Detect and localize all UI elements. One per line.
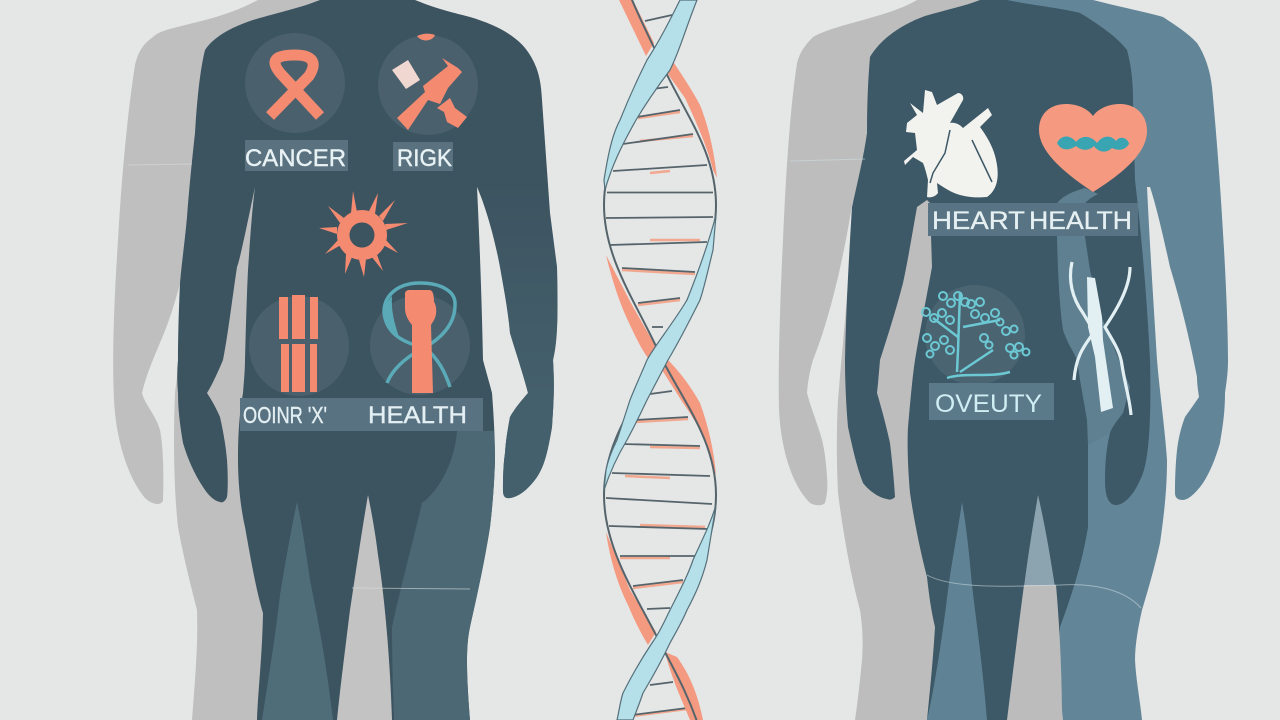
seam lines, left bbox=[128, 164, 470, 589]
icon: tree in circle bbox=[922, 285, 1030, 385]
icon: cancer cell bbox=[319, 191, 408, 277]
right figure group bbox=[779, 0, 1228, 720]
icon: joint in circle bbox=[370, 283, 470, 395]
left figure group bbox=[113, 0, 558, 720]
label: cancer: CANCER bbox=[245, 145, 346, 172]
base pair rungs, coral bbox=[620, 112, 705, 716]
dark body silhouette, left bbox=[177, 0, 558, 720]
label: obesity: OVEUTY bbox=[935, 390, 1042, 418]
helix outlines bbox=[604, 0, 716, 720]
blue strand bbox=[604, 0, 716, 720]
base pair rungs, dark bbox=[606, 15, 713, 715]
seam lines, right bbox=[790, 159, 1141, 608]
label: obesity bbox=[929, 383, 1054, 420]
icon: coral heart with pulse bbox=[1039, 104, 1147, 192]
leg gap, lower gray bbox=[1007, 585, 1062, 720]
icon: white crossed ribbons bbox=[1070, 262, 1131, 415]
teal silhouette, right bbox=[1000, 0, 1228, 720]
icon: anatomical heart bbox=[904, 90, 998, 197]
label: heart health bbox=[928, 203, 1138, 236]
label: risk: RIGK bbox=[397, 145, 452, 172]
teal band over torso bbox=[1056, 188, 1130, 445]
gray shadow silhouette, right bbox=[779, 0, 1070, 720]
dark body silhouette, right bbox=[845, 0, 1150, 720]
label: heart health: HEALTH bbox=[1029, 207, 1132, 235]
icon: ribbon in circle bbox=[245, 33, 345, 133]
label: joint health: HEALTH bbox=[368, 402, 467, 429]
leg gap, left teal bbox=[927, 502, 987, 720]
coral strand bbox=[606, 0, 717, 720]
icon: broken bone in circle bbox=[378, 34, 478, 135]
teal hip and thigh panel, left bbox=[392, 431, 495, 720]
icon: bone bars in circle bbox=[249, 295, 349, 396]
leg gap, gray bbox=[337, 495, 392, 720]
dna double helix bbox=[604, 0, 717, 720]
leg gap, left teal bbox=[262, 502, 333, 720]
label: joint health: OOINR 'X' bbox=[243, 402, 327, 428]
label: joint health bbox=[240, 398, 483, 431]
leg gap, gray teal bbox=[1024, 495, 1055, 587]
gray shadow silhouette, left bbox=[113, 0, 400, 720]
teal arm tint, left bbox=[480, 190, 558, 498]
label: heart health: HEART bbox=[932, 207, 1025, 235]
